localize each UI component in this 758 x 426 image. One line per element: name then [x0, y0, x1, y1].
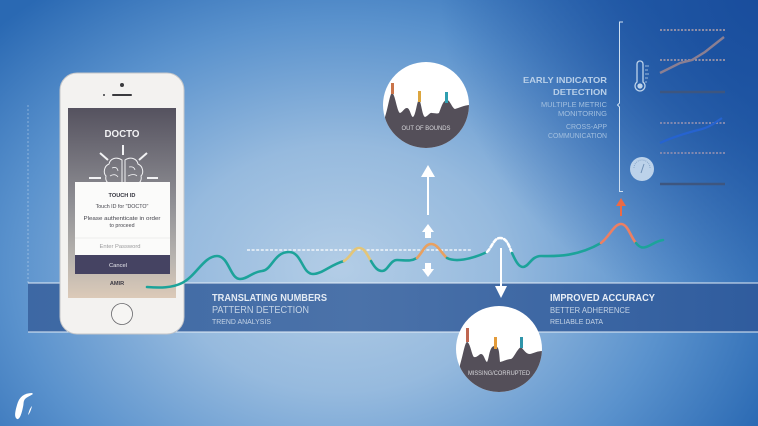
icon: brain with rays: [89, 145, 158, 184]
chart: pressure metric: [660, 118, 726, 184]
threshold dashed line: [247, 249, 471, 251]
touch id dialog: Enter Password: [100, 244, 141, 250]
arrow: red up: [616, 198, 626, 216]
touch id dialog: Please authenticate in order: [84, 216, 161, 222]
icon: gauge: [630, 157, 654, 181]
text block: improved accuracy: [550, 293, 655, 326]
chart: temperature metric: [660, 30, 726, 92]
bracket: [618, 22, 623, 192]
text block: early indicator detection: MULTIPLE METRIC: [541, 100, 608, 109]
phone screen: [68, 108, 176, 298]
callout: missing or corrupted: MISSING/CORRUPTED: [468, 370, 530, 377]
touch id dialog: to proceed: [109, 223, 135, 229]
arrow: short up: [422, 224, 434, 238]
home button: [112, 304, 132, 324]
text block: translating numbers: TREND ANALYSIS: [212, 317, 271, 326]
text block: translating numbers: [212, 293, 327, 326]
arrow: down to missing: [495, 248, 507, 298]
text block: early indicator detection: [523, 75, 608, 140]
text block: early indicator detection: COMMUNICATION: [548, 131, 607, 140]
callout: out of bounds: [382, 62, 470, 150]
text block: early indicator detection: DETECTION: [553, 87, 607, 97]
text block: improved accuracy: IMPROVED ACCURACY: [550, 293, 655, 304]
anomaly: orange: [417, 244, 447, 258]
touch id dialog: [75, 182, 170, 255]
anomaly: red: [601, 224, 636, 243]
text block: early indicator detection: CROSS-APP: [566, 122, 607, 131]
text block: improved accuracy: BETTER ADHERENCE: [550, 305, 630, 315]
user name: AMIR: [110, 281, 124, 287]
cancel button: Cancel: [109, 263, 127, 269]
text block: early indicator detection: EARLY INDICATOR: [523, 75, 607, 85]
touch id dialog: TOUCH ID: [109, 193, 135, 199]
vertical dashed axis: [27, 105, 29, 283]
text block: translating numbers: PATTERN DETECTION: [212, 305, 309, 316]
text block: early indicator detection: MONITORING: [558, 109, 607, 118]
text block: translating numbers: TRANSLATING NUMBERS: [212, 293, 327, 304]
anomaly: missing data: [487, 238, 512, 253]
arrow: long up: [421, 165, 435, 215]
band: summary strip: [28, 283, 758, 332]
phone speaker and camera: [103, 83, 132, 96]
logo: [15, 393, 33, 419]
cancel button: [75, 255, 170, 274]
arrow: short down: [422, 263, 434, 277]
touch id dialog: Touch ID for "DOCTO": [96, 204, 149, 210]
app title: DOCTO: [104, 129, 140, 140]
icon: thermometer: [635, 61, 649, 91]
phone: [60, 73, 184, 334]
callout: missing or corrupted: [456, 306, 542, 395]
trend curve: [147, 224, 663, 288]
anomaly: yellow: [344, 248, 371, 261]
callout: out of bounds: OUT OF BOUNDS: [402, 125, 451, 132]
text block: improved accuracy: RELIABLE DATA: [550, 317, 603, 326]
